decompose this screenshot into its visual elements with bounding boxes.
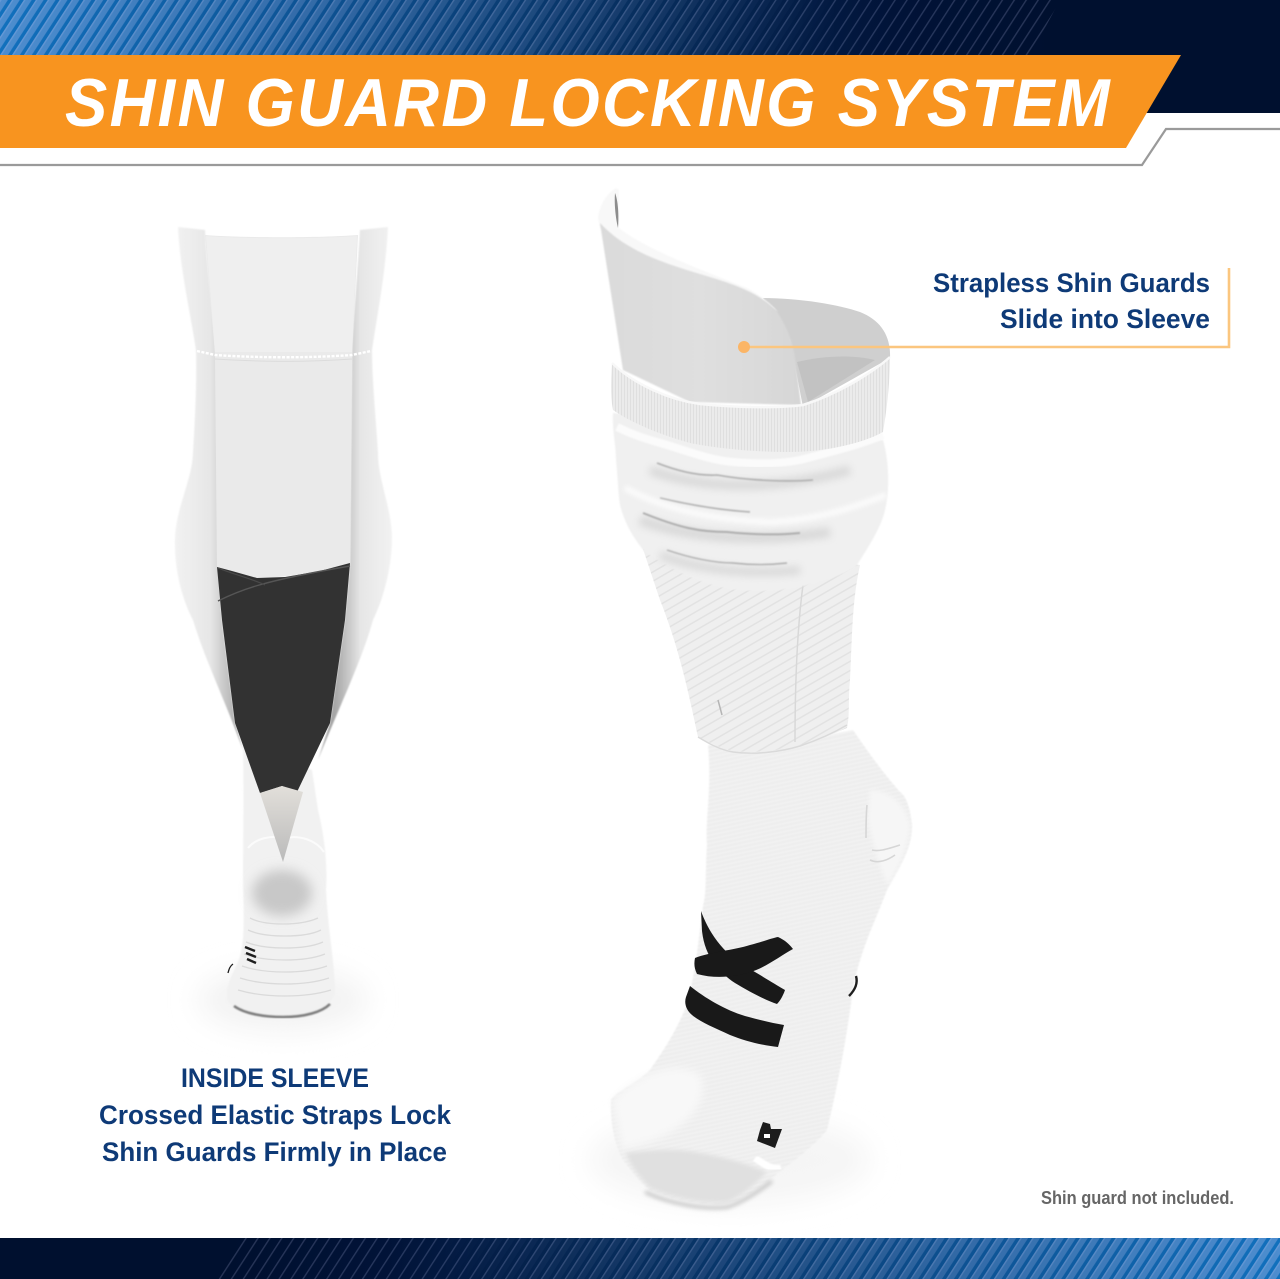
caption: inside sleeve — [99, 1063, 452, 1167]
sleeve hem — [698, 725, 847, 753]
fold highlights — [617, 427, 886, 522]
gray guard point — [260, 786, 303, 862]
right flap — [318, 227, 392, 760]
toe shadow — [645, 1181, 772, 1208]
toe texture — [626, 1150, 767, 1202]
back panel — [205, 235, 358, 578]
left sock: inside sleeve view — [175, 227, 392, 1032]
floor shadow — [590, 1115, 870, 1205]
foot — [611, 730, 912, 1204]
heel detail — [866, 805, 900, 862]
shin guard rim — [598, 188, 778, 312]
callout dot — [738, 341, 750, 353]
fold creases — [643, 463, 813, 564]
foot — [227, 745, 335, 1016]
callout leader line — [744, 268, 1229, 347]
fold soft shades — [640, 470, 850, 572]
black side mark — [849, 976, 857, 996]
interior of sleeve opening — [763, 298, 890, 407]
sleeve cuff — [611, 357, 890, 452]
caption: inside sleeve: INSIDE SLEEVE — [181, 1063, 369, 1093]
title: SHIN GUARD LOCKING SYSTEM — [65, 65, 1112, 141]
callout text: Strapless Shin Guards — [933, 268, 1210, 298]
caption: inside sleeve: Crossed Elastic Straps Lock — [99, 1100, 452, 1130]
callout: strapless shin guards — [738, 268, 1229, 353]
scrunched sleeve body — [613, 413, 888, 591]
calf sleeve — [640, 540, 860, 752]
foot cushion — [868, 790, 910, 885]
caption: inside sleeve: Shin Guards Firmly in Place — [102, 1137, 447, 1167]
callout: strapless shin guards: Slide into Sleeve — [1000, 304, 1210, 334]
footnote: Shin guard not included. — [1041, 1188, 1234, 1208]
right sock with shin guard — [590, 188, 912, 1208]
footer band — [0, 1238, 1280, 1279]
black X logo stripes — [685, 911, 793, 1047]
header band — [0, 0, 1280, 113]
heel shade — [252, 870, 312, 916]
black elastic straps — [217, 563, 350, 793]
interior darker ribs — [797, 356, 875, 402]
sleeve seam — [197, 351, 371, 357]
guard inner dark — [615, 193, 618, 228]
floor shadow — [198, 968, 368, 1032]
foot contour shadow — [234, 1004, 330, 1017]
shin guard face — [600, 223, 801, 405]
orange title banner — [0, 55, 1181, 148]
black R toe logo — [757, 1122, 782, 1148]
heel cup arc — [248, 837, 324, 852]
upper panel highlight — [206, 236, 357, 352]
calf fold — [795, 585, 803, 742]
cuff edge — [612, 357, 890, 407]
logo marks — [228, 947, 256, 973]
left flap — [175, 227, 243, 750]
toe left highlight — [612, 1068, 702, 1150]
toe seam highlight — [755, 1158, 781, 1168]
heel ribs — [238, 918, 331, 996]
